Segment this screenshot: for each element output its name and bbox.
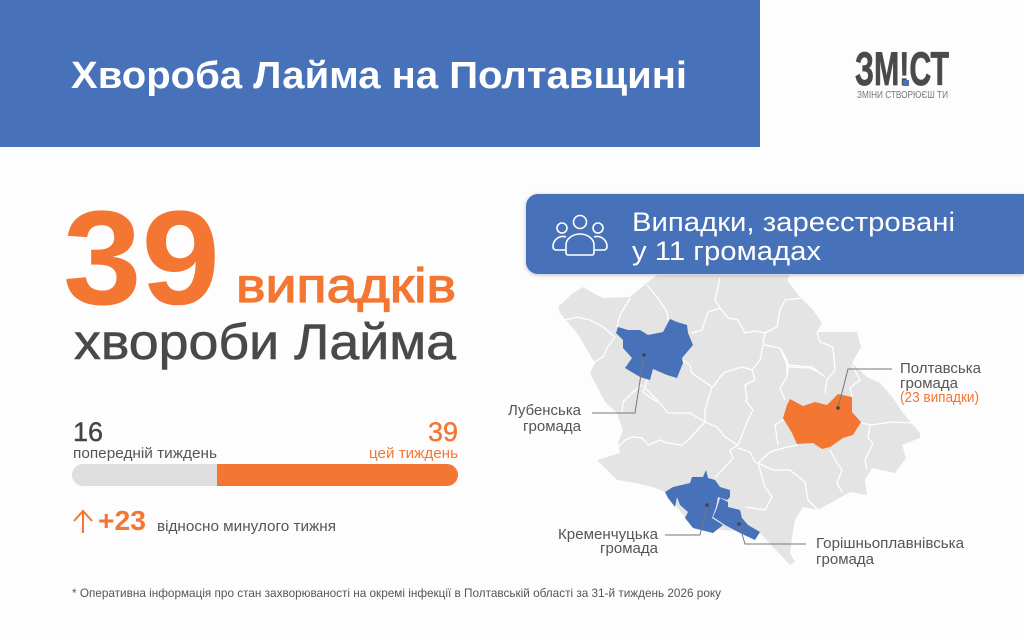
footnote: * Оперативна інформація про стан захворюваності на окремі інфекції в Полтавській області за 31-й тиждень 2026 року [72, 586, 721, 600]
callout: Kremenchuk: громада [600, 541, 659, 557]
comparison bar chart: попередній тиждень [73, 445, 217, 462]
panel: communities heading: у 11 громадах [632, 236, 822, 266]
callout: Horishni Plavni [737, 522, 965, 568]
change indicator: +23 [98, 505, 146, 536]
icon: people [553, 216, 607, 255]
header banner [0, 0, 760, 147]
logo [855, 42, 949, 101]
comparison bar chart: цей тиждень [369, 445, 458, 462]
callout: Horishni Plavni: громада [816, 552, 875, 568]
headline number: хвороби Лайма [74, 314, 456, 370]
callout: Poltava: громада [900, 376, 959, 392]
callout: Horishni Plavni: Горішньоплавнівська [816, 536, 965, 552]
callout: Lubny: громада [523, 419, 582, 435]
callout: Lubny: Лубенська [508, 403, 582, 419]
community: Lubny [616, 319, 693, 380]
change indicator: відносно минулого тижня [157, 518, 336, 535]
callout: Kremenchuk: Кременчуцька [558, 527, 659, 543]
callout: Lubny [508, 353, 646, 435]
change indicator [74, 505, 336, 536]
map of Poltava region [558, 275, 920, 565]
comparison bar chart: 39 [428, 417, 458, 447]
community: Poltava [783, 394, 861, 449]
community: Kremenchuk [665, 470, 730, 533]
callout: Poltava: Полтавська [900, 361, 982, 377]
icon: up arrow [74, 511, 92, 533]
logo: ЗМІНИ СТВОРЮЄШ ТИ [857, 90, 948, 101]
community: Horishni Plavni [713, 498, 760, 540]
headline number: 39 [63, 184, 220, 333]
comparison bar chart: 16 [73, 417, 103, 447]
comparison bar chart [72, 417, 458, 486]
callout: Poltava: (23 випадки) [900, 390, 979, 406]
headline number [63, 184, 456, 370]
callout: Poltava [836, 361, 982, 410]
panel: communities heading: Випадки, зареєстровані [632, 207, 955, 237]
panel: communities heading [526, 194, 1024, 274]
title: Хвороба Лайма на Полтавщині [71, 55, 687, 97]
headline number: випадків [236, 260, 456, 313]
callout: Kremenchuk [558, 503, 709, 557]
logo: ЗМ!СТ [855, 42, 949, 95]
